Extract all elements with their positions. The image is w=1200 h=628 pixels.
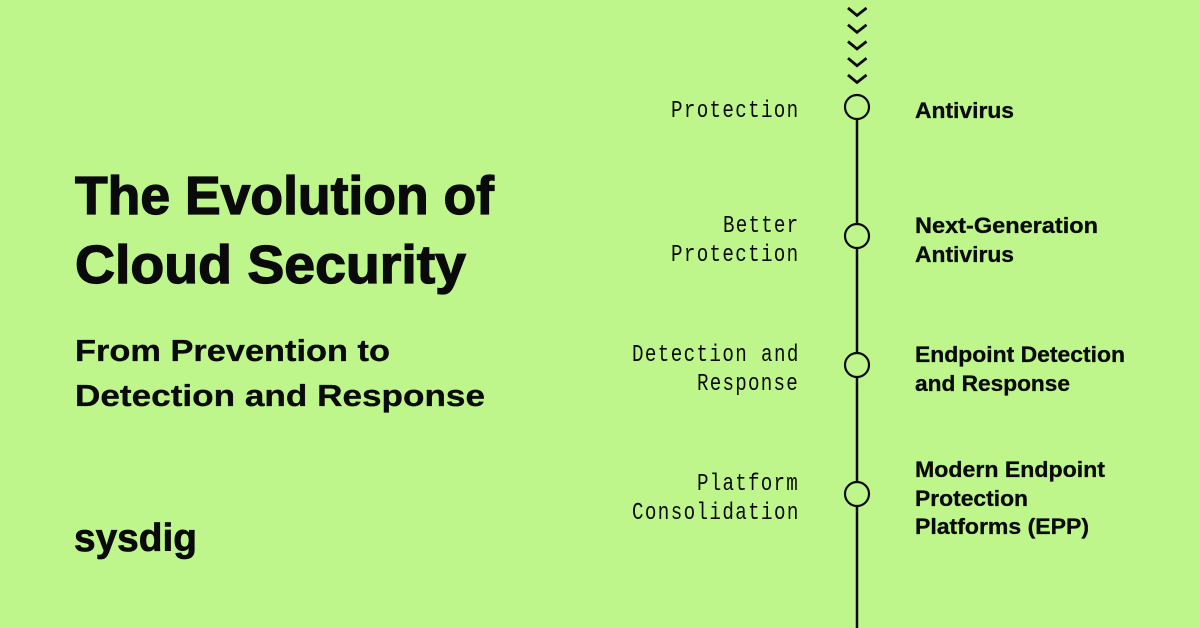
timeline: vertical line — [856, 119, 858, 628]
product: Next-Generation Antivirus: Next-Generation — [915, 213, 1098, 238]
product: Modern Endpoint Protection Platforms (EPP): Protection — [915, 486, 1028, 511]
timeline nodes — [845, 95, 869, 506]
product: Antivirus: Antivirus — [915, 98, 1014, 123]
label: Platform Consolidation: Platform — [697, 470, 798, 498]
title — [75, 166, 495, 295]
label: Detection and Response: Response — [697, 370, 798, 398]
product: Endpoint Detection and Response — [915, 342, 1125, 396]
label: Platform Consolidation — [632, 470, 798, 527]
product: Endpoint Detection and Response: and Response — [915, 371, 1070, 396]
product: Next-Generation Antivirus: Antivirus — [915, 242, 1014, 267]
logo: sysdig: sysdig — [74, 517, 197, 560]
label: Protection: Protection — [671, 97, 798, 125]
product: Modern Endpoint Protection Platforms (EPP) — [915, 457, 1106, 539]
label: Platform Consolidation: Consolidation — [632, 499, 798, 527]
label: Detection and Response — [632, 341, 798, 398]
product: Modern Endpoint Protection Platforms (EPP): Modern Endpoint — [915, 457, 1106, 482]
subtitle: From Prevention to — [75, 333, 390, 368]
label: Detection and Response: Detection and — [632, 341, 798, 369]
product: Endpoint Detection and Response: Endpoint Detection — [915, 342, 1125, 367]
label: Better Protection — [671, 212, 798, 269]
product: Modern Endpoint Protection Platforms (EPP): Platforms (EPP) — [915, 514, 1089, 539]
label: Better Protection: Protection — [671, 241, 798, 269]
title: Cloud Security — [75, 235, 466, 295]
subtitle — [75, 333, 485, 413]
subtitle: Detection and Response — [75, 378, 485, 413]
icon: chevrons pointing down — [848, 8, 866, 82]
label: Better Protection: Better — [723, 212, 798, 240]
product: Next-Generation Antivirus — [915, 213, 1098, 267]
title: The Evolution of — [75, 166, 495, 226]
